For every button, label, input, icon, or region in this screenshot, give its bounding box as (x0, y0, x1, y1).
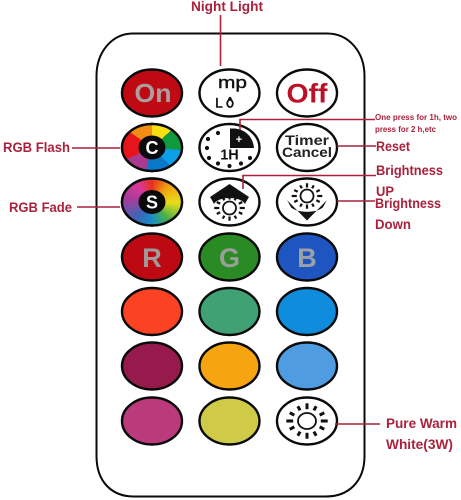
button: yellow olive (200, 398, 260, 444)
button: night light mode: L (215, 94, 223, 110)
button: red orange (122, 288, 182, 335)
button: brightness down (277, 178, 337, 226)
label: Pure Warm White: Pure Warm (386, 416, 457, 431)
arrow: Night Light (220, 15, 222, 66)
button: 1H timer: + (236, 134, 242, 146)
button: G (200, 234, 260, 280)
button: Timer Cancel: Cancel (282, 144, 332, 160)
arrow: Reset (337, 145, 376, 147)
button: Off: Off (286, 78, 329, 108)
button: S colour wheel (122, 178, 182, 226)
button: B: B (297, 243, 317, 273)
button: B (277, 234, 337, 280)
button: crimson (122, 342, 182, 390)
label: Brightness Down: Brightness (375, 196, 441, 211)
label: RGB Flash: RGB Flash (3, 140, 70, 155)
label: Brightness UP (376, 163, 443, 199)
arrow: Pure Warm White (335, 423, 380, 425)
label: Brightness Down: Down (375, 217, 411, 232)
button: Off (277, 70, 337, 116)
button: C colour wheel (122, 124, 182, 171)
label: Brightness UP: UP (376, 184, 394, 199)
button: night light mode: mp (218, 73, 247, 92)
remote control outline (96, 34, 364, 496)
arrow: RGB Fade (77, 206, 120, 208)
arrow: Brightness Down (337, 200, 375, 202)
button: R: R (142, 243, 162, 273)
button: G: G (219, 243, 240, 273)
label: Reset: Reset (376, 139, 410, 154)
button: azure (277, 288, 337, 335)
label: Pure Warm White: White(3W) (386, 437, 453, 452)
button: Timer Cancel (277, 124, 337, 171)
button: R (122, 234, 182, 280)
label: Brightness Down (375, 196, 441, 232)
arrow: timer (240, 120, 375, 130)
button: Timer Cancel: Timer (285, 132, 330, 148)
arrow: Brightness UP (243, 176, 376, 189)
label: RGB Fade: RGB Fade (9, 200, 72, 215)
button: sea green (200, 288, 260, 335)
button: sky blue (277, 342, 337, 390)
button: On: On (134, 78, 172, 108)
button: 1H timer (200, 124, 260, 171)
label: timer press note: press for 2 h,etc (375, 125, 437, 134)
label: Brightness UP: Brightness (376, 163, 443, 178)
button: amber (200, 342, 260, 390)
label: timer press note: One press for 1h, two (375, 113, 457, 122)
arrow: RGB Flash (72, 147, 120, 149)
button: 1H timer: 1H (220, 148, 239, 164)
button: C colour wheel: C (146, 138, 158, 158)
button: S colour wheel: S (146, 192, 158, 212)
button: On (122, 70, 182, 116)
button: brightness up (200, 178, 260, 226)
label: timer press note (375, 113, 457, 134)
button: night light mode (200, 70, 260, 116)
button: magenta (122, 398, 182, 444)
label: Pure Warm White (386, 416, 457, 452)
button: pure warm white (277, 398, 337, 444)
